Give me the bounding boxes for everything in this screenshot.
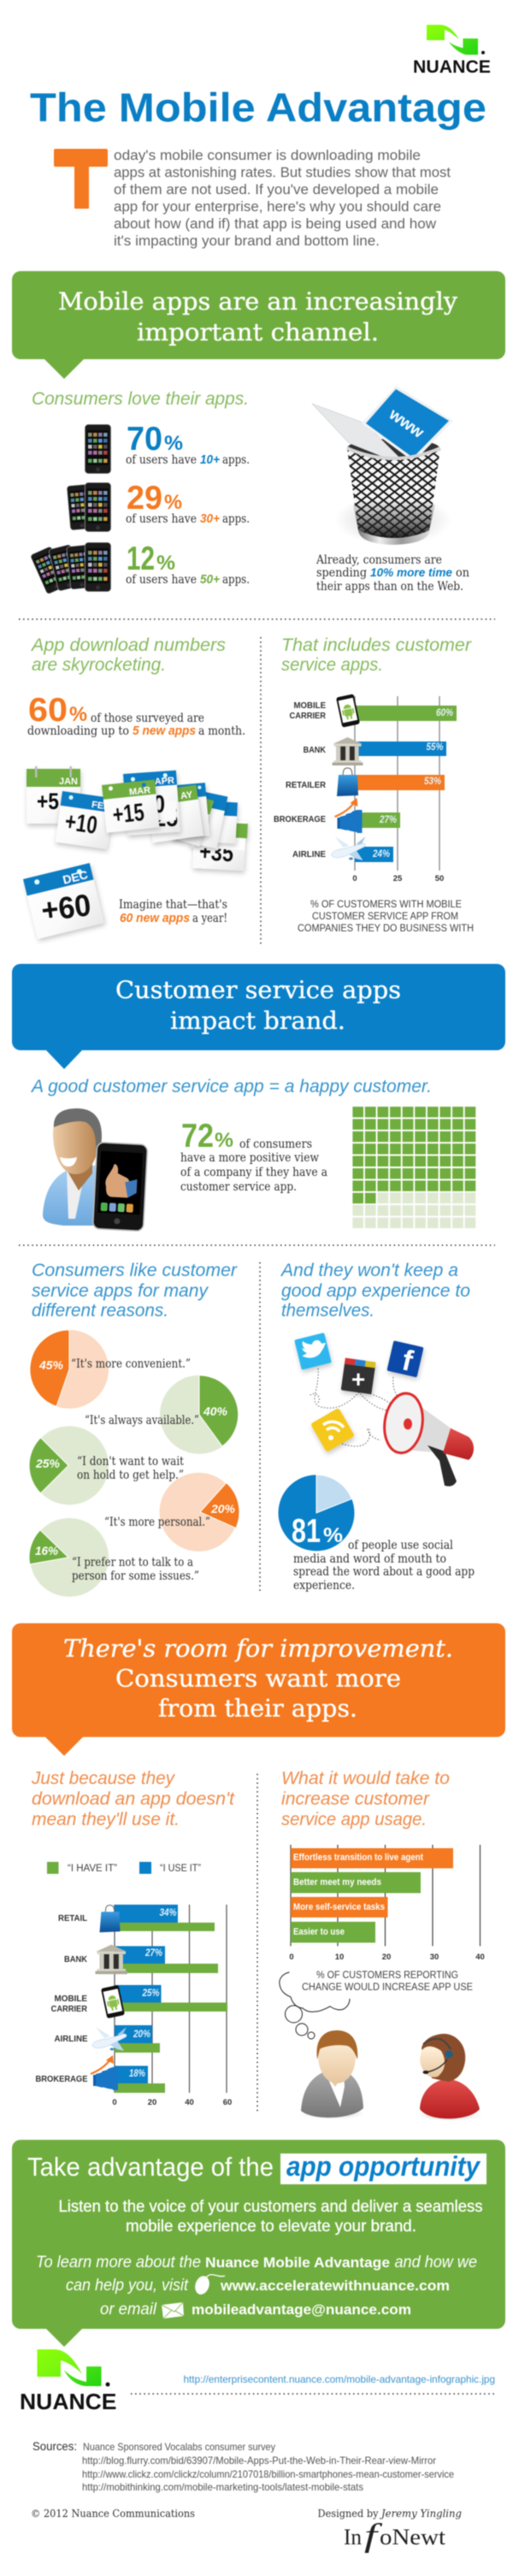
- stat: 70 percent: 10+: [200, 453, 220, 467]
- text: 10 percent more time: their apps than on the Web.: [316, 580, 463, 594]
- banner: app opportunity call to action: mobileadvantage@nuance.com: [192, 2301, 411, 2318]
- stat: 72 percent: of a company if they have a: [180, 1166, 327, 1179]
- bar chart: have it versus use it: BANK: [64, 1955, 88, 1964]
- bar chart: have it versus use it: 25%: [142, 1988, 159, 1999]
- stat: 29 percent: [67, 480, 250, 532]
- stat: 70 percent: %: [164, 432, 183, 455]
- calendar: december +60: DEC: [62, 867, 89, 887]
- heading: download does not mean use: [31, 1769, 235, 1829]
- chart caption: COMPANIES THEY DO BUSINESS WITH: [298, 924, 474, 934]
- bar chart: customer service apps by industry: 0: [352, 874, 357, 883]
- heading: customer service apps: That includes customer: [281, 635, 472, 655]
- stat: 29 percent: 30+: [200, 512, 220, 526]
- bar chart: have it versus use it: 40: [185, 2098, 194, 2107]
- stat: 60 percent: %: [69, 703, 87, 726]
- stat: 12 percent: %: [156, 552, 175, 575]
- designer credit: Designed by: [318, 2507, 379, 2520]
- banner: app opportunity call to action: Nuance Mobile Advantage: [205, 2254, 390, 2271]
- bar chart: customer service apps by industry: 53%: [424, 777, 441, 787]
- pie: 45 percent more convenient: [30, 1330, 191, 1409]
- bar chart: have it versus use it: [36, 1905, 232, 2107]
- bar chart: customer service apps by industry: 55%: [426, 742, 443, 753]
- waffle chart: 72 of 100: [352, 1107, 475, 1228]
- icon: computer mouse: [192, 2274, 225, 2296]
- copyright: © 2012 Nuance Communications: [31, 2507, 195, 2520]
- bar chart: have it versus use it: MOBILE: [55, 1994, 87, 2004]
- stat: 81 percent pie: spread the word about a good app: [293, 1565, 475, 1579]
- heading: download does not mean use: Just because they: [31, 1769, 175, 1788]
- stat: 72 percent: [180, 1118, 327, 1194]
- stat: 29 percent: of users have: [126, 512, 197, 526]
- calendars: monthly downloads: [27, 766, 248, 871]
- InfoNewt logo: In: [344, 2525, 362, 2549]
- calendars: monthly downloads: MAR: [128, 785, 151, 798]
- bar chart: what would increase usage: 30: [430, 1953, 439, 1962]
- banner: app opportunity call to action: and how we: [395, 2254, 477, 2272]
- bar chart: have it versus use it: AIRLINE: [55, 2035, 88, 2044]
- pie: 16 percent prefer not to talk: person for some issues.”: [72, 1569, 199, 1583]
- stat: 12 percent: [30, 541, 250, 594]
- bar chart: have it versus use it: CARRIER: [51, 2005, 88, 2014]
- banner: customer service apps impact brand: impact brand.: [170, 1007, 345, 1035]
- heading: download does not mean use: download an app doesn't: [32, 1789, 235, 1809]
- bar chart: customer service apps by industry: AIRLINE: [292, 850, 326, 860]
- icon: laptop in trash can: www: [385, 405, 428, 442]
- bar chart: have it versus use it: 27%: [144, 1948, 162, 1959]
- InfoNewt logo: f: [364, 2518, 382, 2554]
- stat: 60 percent: 5 new apps: [133, 724, 196, 738]
- icon: social media megaphone: +: [351, 1366, 365, 1392]
- banner: app opportunity call to action: can help you, visit: [66, 2277, 189, 2295]
- intro paragraph: [114, 148, 451, 249]
- chart caption: CUSTOMER SERVICE APP FROM: [312, 912, 458, 922]
- calendars: monthly downloads: +10: [63, 808, 99, 840]
- infographic URL: http://enterprisecontent.nuance.com/mobile-advantage-infographic.jpg: [183, 2373, 495, 2385]
- banner: app opportunity call to action: Listen to the voice of your customers and deliver a seamless: [58, 2198, 482, 2216]
- drop cap T: [54, 149, 108, 209]
- stat: 72 percent: 72: [181, 1118, 214, 1155]
- calendar: december +60: +60: [39, 887, 93, 928]
- banner: app opportunity call to action: or email: [100, 2301, 157, 2319]
- bar chart: customer service apps by industry: 25: [393, 874, 403, 883]
- banner: customer service apps impact brand: Customer service apps: [115, 976, 401, 1004]
- icon: envelope: [162, 2302, 184, 2319]
- stat: 60 percent: [27, 692, 245, 738]
- chart caption: [298, 900, 474, 934]
- bar chart: have it versus use it: 18%: [129, 2069, 145, 2079]
- stat: 72 percent: customer service app.: [180, 1180, 297, 1194]
- chart caption: % OF CUSTOMERS WITH MOBILE: [310, 900, 462, 910]
- pie: 16 percent prefer not to talk: [29, 1518, 199, 1597]
- calendars: monthly downloads: +25: [142, 805, 178, 832]
- calendars: monthly downloads: APR: [154, 776, 174, 787]
- text: 10 percent more time: Already, consumers are: [315, 553, 442, 567]
- sources: Nuance Sponsored Vocalabs consumer survey: [83, 2441, 275, 2453]
- bar chart: customer service apps by industry: 27%: [379, 815, 397, 825]
- text: 60 new apps a year: 60 new apps: [120, 912, 190, 925]
- heading: app download numbers: App download numbers: [30, 635, 227, 655]
- heading: good app experience: themselves.: [281, 1301, 374, 1320]
- bar chart: what would increase usage: [289, 1845, 485, 1962]
- bar chart: what would increase usage: 40: [475, 1953, 485, 1962]
- stat: 72 percent: of consumers: [239, 1137, 312, 1151]
- stat: 70 percent: apps.: [222, 453, 250, 467]
- stat: 12 percent: of users have: [126, 573, 197, 587]
- chart caption: % OF CUSTOMERS REPORTING: [316, 1970, 458, 1981]
- chart legend: “I USE IT”: [160, 1864, 201, 1874]
- designer credit: [318, 2507, 462, 2520]
- stat: 29 percent: %: [164, 491, 182, 514]
- chart legend: “I HAVE IT”: [68, 1864, 117, 1874]
- text: 60 new apps a year: [119, 898, 227, 925]
- bar chart: what would increase usage: Easier to use: [293, 1927, 345, 1937]
- calendars: monthly downloads: +35: [198, 838, 234, 867]
- stat: 60 percent: of those surveyed are: [91, 712, 204, 725]
- chart caption: [302, 1970, 473, 1993]
- pie: 16 percent prefer not to talk: “I prefer not to talk to a: [72, 1556, 193, 1569]
- pie: 20 percent more personal: “It's more personal.”: [104, 1515, 210, 1529]
- title: The Mobile Advantage: [30, 85, 486, 130]
- pie: 40 percent always available: “It's always available.”: [85, 1414, 199, 1427]
- heading: customer service apps: [281, 635, 472, 675]
- pie: 25 percent no wait: 25%: [35, 1457, 60, 1470]
- heading: what it would take: increase customer: [281, 1789, 430, 1809]
- banner: app opportunity call to action: mobile experience to elevate your brand.: [126, 2218, 416, 2236]
- text: 10 percent more time: [315, 553, 469, 594]
- banner: customer service apps impact brand: [12, 964, 505, 1069]
- bar chart: customer service apps by industry: [274, 694, 457, 883]
- heading: download does not mean use: mean they'll use it.: [32, 1810, 180, 1829]
- pie: 45 percent more convenient: 45%: [38, 1359, 63, 1372]
- bar chart: customer service apps by industry: BANK: [304, 746, 327, 755]
- bar chart: customer service apps by industry: 24%: [372, 849, 390, 860]
- Nuance logo (top): NUANCE: [413, 57, 491, 77]
- stat: 81 percent pie: experience.: [293, 1579, 355, 1592]
- heading: what it would take: What it would take to: [281, 1769, 450, 1788]
- heading: what it would take: [281, 1769, 450, 1829]
- bar chart: what would increase usage: Better meet my needs: [293, 1877, 381, 1888]
- heading: consumers like customer service apps: Consumers like customer: [32, 1261, 238, 1280]
- stat: 12 percent: apps.: [222, 573, 250, 587]
- pie: 25 percent no wait: on hold to get help.”: [77, 1468, 184, 1482]
- InfoNewt logo: [344, 2518, 446, 2554]
- banner: app opportunity call to action: To learn more about the: [36, 2254, 201, 2272]
- heading: what it would take: service app usage.: [281, 1810, 427, 1829]
- bar chart: have it versus use it: 34%: [159, 1908, 176, 1918]
- stat: 81 percent pie: %: [323, 1524, 343, 1547]
- sources: [32, 2439, 454, 2493]
- pie: 45 percent more convenient: “It's more convenient.”: [71, 1357, 191, 1371]
- pie: 20 percent more personal: [104, 1473, 239, 1551]
- bar chart: customer service apps by industry: MOBILE: [294, 701, 326, 711]
- heading: good app experience: [280, 1261, 470, 1320]
- sources: http://mobithinking.com/mobile-marketing-tools/latest-mobile-stats: [82, 2481, 363, 2493]
- text: 60 new apps a year: Imagine that—that's: [119, 898, 227, 912]
- calendars: monthly downloads: +20: [129, 791, 165, 818]
- bar chart: customer service apps by industry: 50: [435, 874, 444, 883]
- heading: good app equals happy customer: A good customer service app = a happy customer.: [30, 1077, 432, 1096]
- banner: app opportunity call to action: app opportunity: [286, 2151, 481, 2182]
- bar chart: what would increase usage: 10: [335, 1953, 344, 1962]
- pie: 40 percent always available: 40%: [203, 1405, 227, 1418]
- bar chart: what would increase usage: 20: [382, 1953, 391, 1962]
- icon: thought bubble: [280, 1972, 350, 2039]
- text: 60 new apps a year: a year!: [192, 912, 227, 925]
- bar chart: customer service apps by industry: BROKERAGE: [274, 815, 326, 824]
- intro paragraph: of them are not used. If you've developed a mobile: [114, 182, 439, 198]
- bar chart: customer service apps by industry: CARRIER: [289, 712, 327, 721]
- banner: mobile apps channel: important channel.: [137, 318, 379, 346]
- Nuance logo (bottom): [20, 2349, 116, 2414]
- stat: 72 percent: %: [215, 1129, 233, 1152]
- stat: 72 percent: have a more positive view: [180, 1151, 319, 1165]
- pie: 25 percent no wait: [29, 1427, 185, 1505]
- stat: 81 percent pie: of people use social: [348, 1539, 453, 1552]
- heading: consumers like customer service apps: service apps for many: [32, 1281, 209, 1301]
- stat: 60 percent: a month.: [198, 724, 245, 738]
- pie: 25 percent no wait: “I don't want to wait: [77, 1455, 185, 1468]
- text: 10 percent more time: spending: [316, 566, 367, 580]
- pie: 20 percent more personal: 20%: [210, 1503, 235, 1515]
- bar chart: customer service apps by industry: 60%: [436, 708, 453, 718]
- heading: good app experience: And they won't keep a: [280, 1261, 458, 1280]
- pie: 40 percent always available: [85, 1375, 239, 1454]
- stat: 60 percent: 60: [28, 692, 68, 729]
- banner: room for improvement: [12, 1623, 505, 1756]
- intro paragraph: app for your enterprise, here's why you should care: [114, 199, 441, 215]
- stat: 29 percent: apps.: [222, 512, 250, 526]
- banner: mobile apps channel: [12, 271, 505, 379]
- sources: http://blog.flurry.com/bid/63907/Mobile-Apps-Put-the-Web-in-Their-Rear-view-Mirror: [82, 2455, 436, 2467]
- Nuance logo (bottom): NUANCE: [20, 2389, 116, 2414]
- stat: 70 percent: 70: [127, 421, 162, 458]
- stat: 12 percent: 12: [127, 541, 155, 577]
- heading: app download numbers: are skyrocketing.: [32, 655, 166, 675]
- stat: 29 percent: 29: [127, 480, 162, 517]
- stat: 70 percent: of users have: [126, 453, 197, 467]
- stat: 70 percent: [85, 421, 250, 474]
- bar chart: what would increase usage: Effortless transition to live agent: [293, 1852, 423, 1863]
- icon: customer man: [300, 2030, 365, 2119]
- chart legend: [47, 1862, 201, 1874]
- heading: customer service apps: service apps.: [281, 655, 383, 675]
- stat: 81 percent pie: 81: [292, 1513, 321, 1550]
- bar chart: what would increase usage: 0: [289, 1953, 294, 1962]
- stat: 81 percent pie: media and word of mouth to: [293, 1552, 446, 1566]
- banner: app opportunity call to action: Take advantage of the: [27, 2152, 274, 2182]
- banner: mobile apps channel: Mobile apps are an increasingly: [58, 287, 457, 316]
- icon: customer service agent: [417, 2034, 482, 2121]
- banner: room for improvement: Consumers want more: [115, 1664, 401, 1693]
- heading: consumers like customer service apps: [32, 1261, 238, 1320]
- stat: 81 percent pie: [279, 1474, 475, 1592]
- sources: Sources:: [32, 2439, 77, 2453]
- calendars: monthly downloads: JAN: [59, 777, 78, 787]
- calendars: monthly downloads: AY: [180, 789, 194, 801]
- Nuance logo (top): [413, 25, 491, 77]
- pie: 16 percent prefer not to talk: 16%: [35, 1545, 58, 1557]
- bar chart: customer service apps by industry: RETAILER: [286, 781, 327, 790]
- InfoNewt logo: oNewt: [380, 2525, 446, 2549]
- bar chart: have it versus use it: 20%: [133, 2029, 150, 2040]
- bar chart: have it versus use it: RETAIL: [58, 1914, 87, 1923]
- banner: room for improvement: There's room for improvement.: [63, 1634, 453, 1663]
- heading: consumers love their apps: Consumers love their apps.: [32, 389, 249, 409]
- icon: social media megaphone: [294, 1332, 474, 1486]
- calendar: december +60: [23, 863, 104, 939]
- bar chart: have it versus use it: 0: [112, 2098, 117, 2107]
- bar chart: have it versus use it: 60: [223, 2098, 232, 2107]
- banner: app opportunity call to action: [12, 2140, 505, 2347]
- text: 10 percent more time: on: [456, 566, 469, 580]
- heading: consumers like customer service apps: different reasons.: [32, 1301, 168, 1320]
- intro paragraph: oday's mobile consumer is downloading mobile: [114, 148, 421, 163]
- chart caption: CHANGE WOULD INCREASE APP USE: [302, 1982, 473, 1993]
- heading: good app experience: good app experience to: [281, 1281, 470, 1301]
- banner: room for improvement: from their apps.: [158, 1694, 357, 1722]
- designer credit: Jeremy Yingling: [379, 2507, 462, 2520]
- intro paragraph: it's impacting your brand and bottom line.: [114, 233, 380, 249]
- heading: app download numbers: [30, 635, 227, 675]
- sources: http://www.clickz.com/clickz/column/2107018/billion-smartphones-mean-customer-service: [82, 2468, 454, 2480]
- text: 10 percent more time: 10% more time: [370, 565, 452, 579]
- stat: 60 percent: downloading up to: [27, 724, 129, 738]
- calendars: monthly downloads: +15: [111, 799, 145, 830]
- stat: 12 percent: 50+: [200, 573, 220, 587]
- intro paragraph: apps at astonishing rates. But studies show that most: [114, 165, 451, 180]
- bar chart: what would increase usage: More self-service tasks: [293, 1902, 385, 1912]
- calendars: monthly downloads: FEB: [91, 800, 111, 812]
- calendars: monthly downloads: +5: [37, 789, 59, 814]
- bar chart: have it versus use it: 20: [148, 2098, 156, 2107]
- icon: social media megaphone: f: [399, 1344, 416, 1378]
- intro paragraph: about how (and if) that app is being used and how: [114, 216, 436, 232]
- bar chart: have it versus use it: BROKERAGE: [36, 2075, 88, 2084]
- banner: app opportunity call to action: www.acceleratewithnuance.com: [220, 2278, 450, 2294]
- icon: happy man with phone: [43, 1108, 148, 1232]
- icon: laptop in trash can: [312, 386, 453, 546]
